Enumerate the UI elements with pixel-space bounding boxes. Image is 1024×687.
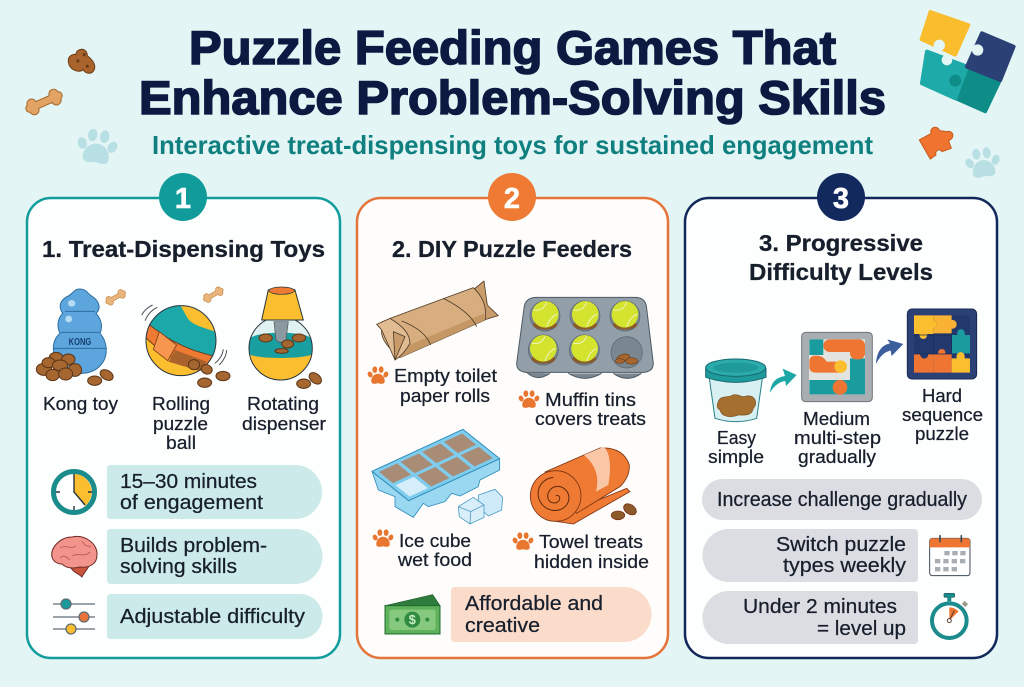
- label: rolling puzzle ball: puzzle: [153, 413, 208, 434]
- label: hard sequence puzzle: [902, 385, 983, 444]
- badge 1: [159, 173, 207, 221]
- icon: clock: [54, 472, 94, 512]
- pill: switch puzzle types weekly: [702, 529, 918, 582]
- title: Puzzle Feeding Games That: [189, 21, 836, 74]
- icon: faint paw left: [73, 126, 121, 166]
- arrow: easy to medium: [770, 369, 797, 393]
- label: hard sequence puzzle: puzzle: [915, 423, 969, 444]
- pill: 15-30 minutes: of engagement: [120, 492, 263, 514]
- pill: builds problem-solving skills: [107, 529, 322, 584]
- illustration: rotating dispenser: [247, 287, 324, 388]
- pill: under 2 minutes level up: [702, 591, 918, 644]
- illustration: kong toy: KONG: [69, 337, 91, 348]
- label: Kong toy: Kong toy: [43, 393, 119, 414]
- title: Enhance Problem-Solving Skills: [139, 71, 886, 124]
- illustration: easy cup: [706, 359, 766, 422]
- panel 3 heading: [749, 230, 933, 285]
- illustration: hard jigsaw puzzle: [907, 309, 977, 379]
- label: muffin tins covers treats: [518, 389, 646, 429]
- panel: DIY puzzle feeders: [357, 173, 668, 658]
- label: rolling puzzle ball: ball: [166, 432, 196, 453]
- badge 2: [488, 173, 536, 221]
- label: medium multi-step gradually: Medium: [803, 408, 870, 429]
- panel 3 heading: Difficulty Levels: [749, 259, 933, 285]
- pill: adjustable difficulty: [107, 594, 322, 639]
- illustration: rolled towel: [530, 447, 638, 524]
- pill: increase challenge gradually: Increase challenge gradually: [717, 489, 967, 511]
- icon: faint paw right: [962, 145, 1003, 180]
- icon: calendar: [930, 536, 970, 576]
- illustration: medium sliding puzzle: [802, 332, 872, 402]
- pill: adjustable difficulty: Adjustable difficulty: [120, 606, 305, 628]
- pill: switch puzzle types weekly: types weekly: [783, 555, 906, 577]
- label: rotating dispenser: [242, 393, 326, 434]
- panel 3 heading: 3. Progressive: [759, 230, 923, 256]
- label: empty toilet paper rolls: paper rolls: [400, 385, 490, 406]
- pill: affordable and creative: creative: [465, 615, 540, 637]
- panel 3 frame: [685, 198, 997, 658]
- icon: brain: [52, 536, 97, 577]
- badge 3: 3: [833, 183, 849, 215]
- label: empty toilet paper rolls: Empty toilet: [394, 365, 497, 386]
- pill: under 2 minutes level up: Under 2 minutes: [743, 596, 897, 618]
- label: medium multi-step gradually: [794, 408, 881, 467]
- pill: 15-30 minutes: [107, 465, 322, 519]
- illustration: muffin tin with tennis balls: [517, 297, 653, 378]
- label: medium multi-step gradually: multi-step: [794, 427, 881, 448]
- label: towel treats hidden inside: Towel treats: [539, 531, 643, 552]
- label: muffin tins covers treats: covers treats: [535, 408, 646, 429]
- icon: sliders: [53, 599, 95, 634]
- pill: builds problem-solving skills: Builds problem-: [120, 535, 267, 557]
- pill: affordable and creative: Affordable and: [465, 593, 603, 615]
- label: rotating dispenser: Rotating: [247, 393, 319, 414]
- title: [139, 21, 886, 124]
- illustration: ice cube tray: [372, 429, 503, 524]
- label: easy simple: [708, 427, 764, 467]
- illustration: rolling puzzle ball: [142, 285, 230, 387]
- icon: biscuit treat: [68, 49, 95, 73]
- icon: small orange puzzle piece: [919, 127, 953, 159]
- badge 2: 2: [504, 183, 520, 215]
- arrow: medium to hard: [876, 339, 903, 364]
- panel 1 heading: 1. Treat-Dispensing Toys: [42, 236, 325, 262]
- label: rolling puzzle ball: [152, 393, 210, 453]
- badge 3: [817, 173, 865, 221]
- label: easy simple: Easy: [717, 427, 757, 448]
- illustration: toilet paper roll: [377, 281, 498, 360]
- icon: money: [385, 595, 440, 634]
- label: medium multi-step gradually: gradually: [798, 446, 877, 467]
- icon: money: $: [409, 613, 416, 627]
- label: rolling puzzle ball: Rolling: [152, 393, 210, 414]
- panel 1 frame: [27, 198, 340, 658]
- label: towel treats hidden inside: [512, 531, 649, 572]
- badge 1: 1: [175, 183, 191, 215]
- label: empty toilet paper rolls: [367, 365, 497, 406]
- icon: stopwatch: [932, 593, 968, 638]
- pill: under 2 minutes level up: = level up: [817, 618, 906, 640]
- label: muffin tins covers treats: Muffin tins: [545, 389, 636, 410]
- label: hard sequence puzzle: Hard: [922, 385, 962, 406]
- subtitle: Interactive treat-dispensing toys for sustained engagement: [152, 130, 873, 160]
- pill: affordable and creative: [451, 587, 652, 642]
- label: hard sequence puzzle: sequence: [902, 404, 983, 425]
- pill: switch puzzle types weekly: Switch puzzle: [776, 534, 906, 556]
- panel 2 heading: 2. DIY Puzzle Feeders: [392, 236, 632, 262]
- icon: puzzle pieces cluster: [921, 12, 1014, 112]
- label: easy simple: simple: [708, 446, 764, 467]
- icon: bone treat: [23, 87, 65, 117]
- illustration: kong toy: [36, 288, 128, 385]
- pill: builds problem-solving skills: solving skills: [120, 556, 237, 578]
- label: rotating dispenser: dispenser: [242, 413, 326, 434]
- panel: treat-dispensing toys: [27, 173, 340, 658]
- label: towel treats hidden inside: hidden inside: [534, 551, 649, 572]
- label: ice cube wet food: Ice cube: [399, 530, 471, 551]
- label: ice cube wet food: [372, 529, 472, 570]
- label: ice cube wet food: wet food: [397, 549, 472, 570]
- pill: increase challenge gradually: [702, 479, 982, 520]
- pill: 15-30 minutes: 15–30 minutes: [120, 471, 257, 493]
- panel 2 frame: [357, 198, 668, 658]
- panel: progressive difficulty levels: [685, 173, 997, 658]
